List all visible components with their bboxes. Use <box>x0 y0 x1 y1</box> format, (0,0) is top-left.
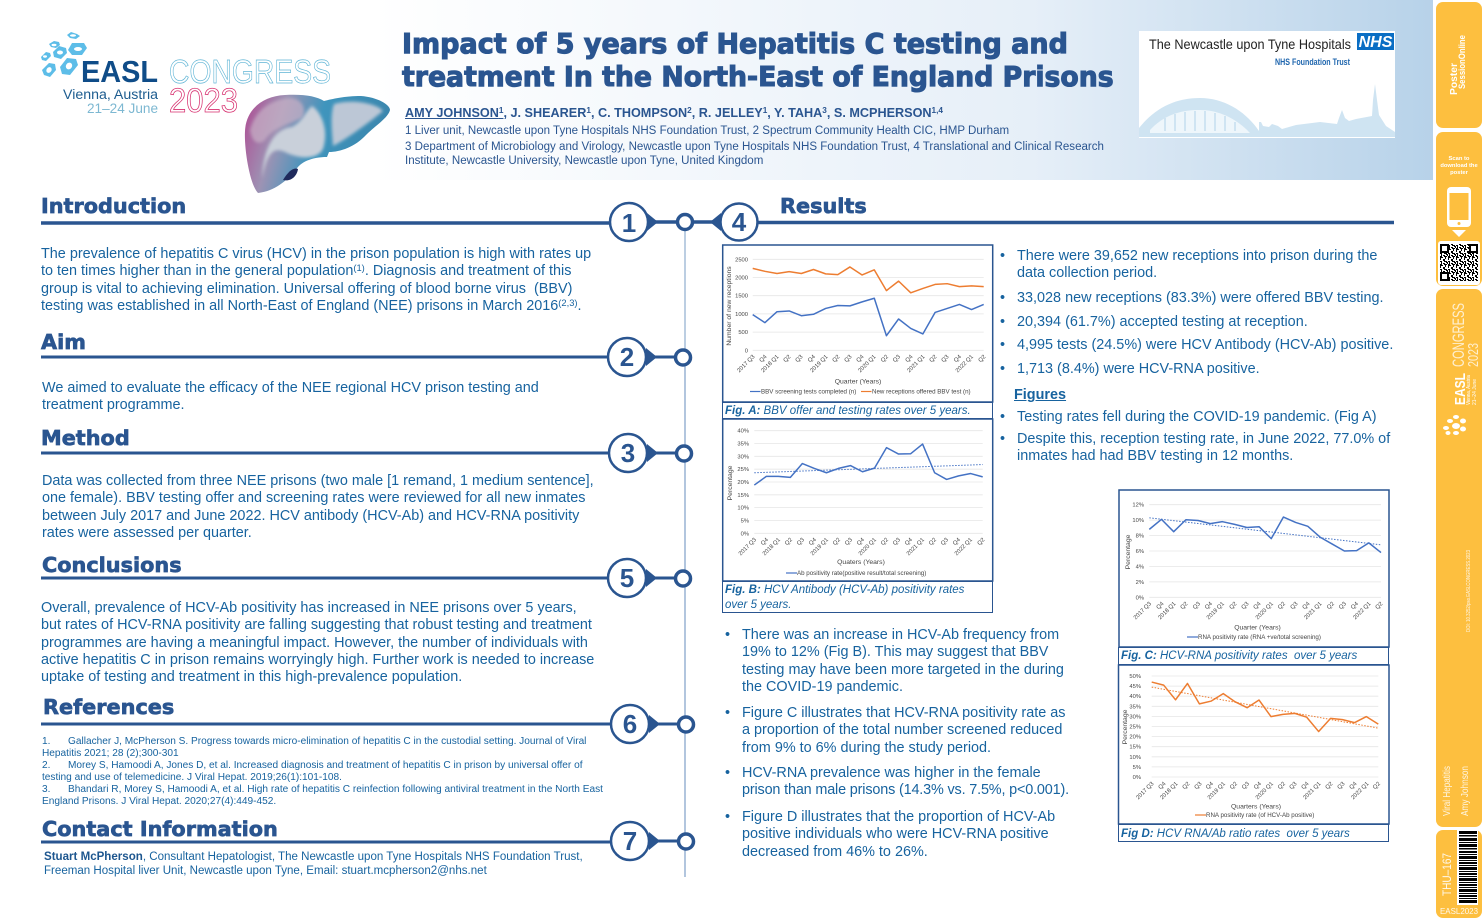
chart: Fig C HCV-RNA positivity: 12% <box>1132 503 1144 509</box>
chart: Fig C HCV-RNA positivity: Q3 <box>1338 601 1348 611</box>
chart: Fig D HCV RNA/Ab ratio: Q3 <box>1289 781 1298 791</box>
results bullets: top right: There were 39,652 new receptions into prison during the data collection period. <box>1017 248 1377 281</box>
results bullets: lower middle: Figure D illustrates that the proportion of HCV-Ab positive individuals who were HCV-RNA positive decreased from 46% to 26%. <box>742 809 1055 860</box>
chart: Fig B HCV antibody positivity: Q2 <box>880 537 890 547</box>
chart: Fig C HCV-RNA positivity: Quarter (Years) <box>1234 624 1281 632</box>
chart: Fig C HCV-RNA positivity: Q4 <box>1302 601 1312 611</box>
chart: Fig D HCV RNA/Ab ratio: 2019 Q1 <box>1207 781 1227 801</box>
chart: Fig D HCV RNA/Ab ratio: 45% <box>1129 684 1141 690</box>
results bullets: lower middle: • <box>725 809 730 825</box>
icon: hexagon cluster <box>41 32 87 77</box>
section rule and node 3 <box>41 434 692 472</box>
sidebar: rotated congress branding: 21–24 June <box>1472 379 1478 405</box>
icon: bridge and skyline <box>1139 84 1395 137</box>
chart: Fig B HCV antibody positivity: Q2 <box>977 537 986 547</box>
heading: Contact Information: Contact Information <box>42 817 278 841</box>
chart: Fig D HCV RNA/Ab ratio: 25% <box>1129 724 1141 730</box>
chart: Fig A BBV offer and testing: Q4 <box>807 354 817 364</box>
chart: Fig C HCV-RNA positivity: Q2 <box>1180 601 1189 611</box>
chart: Fig B HCV antibody positivity: 0% <box>741 531 749 537</box>
section rule and node 7: 7 <box>623 826 637 856</box>
chart: Fig C HCV-RNA positivity: Q2 <box>1229 601 1238 611</box>
results bullets: top right: • <box>1000 409 1005 425</box>
sidebar: rotated congress branding: EASL <box>1452 373 1469 405</box>
heading: Results: Results <box>780 194 867 218</box>
caption: Fig A: Fig. A: BBV offer and testing rates over 5 years. <box>725 405 971 417</box>
chart: Fig A BBV offer and testing: 2020 Q1 <box>857 354 877 374</box>
chart: Fig A BBV offer and testing: Q4 <box>905 354 915 364</box>
chart: Fig C HCV-RNA positivity: 4% <box>1136 564 1144 570</box>
chart: Fig D HCV RNA/Ab ratio: 0% <box>1133 775 1141 781</box>
section rule and node 2 <box>41 338 690 376</box>
chart: Fig D HCV RNA/Ab ratio: 50% <box>1129 674 1141 680</box>
chart: Fig C HCV-RNA positivity: Q4 <box>1156 601 1166 611</box>
results bullets: top right: • <box>1000 248 1005 264</box>
chart: Fig A BBV offer and testing: Q3 <box>844 354 853 364</box>
logo: Newcastle upon Tyne Hospitals NHS <box>1139 31 1395 138</box>
chart: Fig B HCV antibody positivity: Ab positivity rate(positive result/total screening) <box>797 570 926 577</box>
chart: Fig C HCV-RNA positivity: Percentage <box>1125 534 1132 569</box>
section rule and node 1: 1 <box>622 208 636 238</box>
chart: Fig A BBV offer and testing: 2000 <box>735 276 748 282</box>
chart: Fig B HCV antibody positivity: Percentage <box>727 465 734 500</box>
chart: Fig D HCV RNA/Ab ratio: 2018 Q1 <box>1159 781 1179 801</box>
sidebar: scan to download text: download the <box>1440 163 1478 169</box>
results bullets: top right: 20,394 (61.7%) accepted testing at reception. <box>1017 314 1308 330</box>
heading: Conclusions: Conclusions <box>42 553 182 577</box>
chart: Fig D HCV RNA/Ab ratio: Q4 <box>1349 781 1359 791</box>
chart: Fig D HCV RNA/Ab ratio: 2022 Q1 <box>1350 781 1370 801</box>
chart: Fig C HCV-RNA positivity: 2020 Q1 <box>1255 601 1275 621</box>
chart: Fig C HCV-RNA positivity: Q4 <box>1204 601 1214 611</box>
chart: Fig C HCV-RNA positivity: Q3 <box>1290 601 1299 611</box>
chart: Fig C HCV-RNA positivity: 2022 Q1 <box>1352 601 1372 621</box>
chart: Fig B HCV antibody positivity: 20% <box>737 480 749 486</box>
chart: Fig C HCV-RNA positivity: Q2 <box>1277 601 1287 611</box>
EASL Congress logo: 21–24 June <box>87 101 158 116</box>
timeline vertical line <box>684 230 686 877</box>
results bullets: top right: • <box>1000 290 1005 306</box>
text: method: Data was collected from three NEE prisons (two male [1 remand, 1 medium sentence], one female). BBV testing offer and screening rates were reviewed for all new inmates between July 2017 and June 2022. HCV antibody (HCV-Ab) and HCV-RNA positivity rates were assessed per quarter. <box>42 473 594 541</box>
chart: Fig C HCV-RNA positivity: Q3 <box>1192 601 1202 611</box>
chart: Fig B HCV antibody positivity: Quaters (Years) <box>837 559 885 566</box>
caption: Fig D <box>1118 824 1389 842</box>
icon: QR code <box>1438 241 1480 285</box>
heading: Introduction: Introduction <box>41 194 186 218</box>
chart: Fig C HCV-RNA positivity: Q2 <box>1326 601 1336 611</box>
chart: Fig A BBV offer and testing: 1500 <box>735 294 748 300</box>
sidebar: barcode <box>1457 830 1478 905</box>
chart: Fig D HCV RNA/Ab ratio: 2017 Q3 <box>1135 781 1155 801</box>
chart: Fig D HCV RNA/Ab ratio: Q4 <box>1205 781 1215 791</box>
heading: Method: Method <box>41 426 130 450</box>
results bullets: lower middle: • <box>725 627 730 643</box>
chart: Fig C HCV-RNA positivity: 8% <box>1136 534 1144 540</box>
chart: Fig A BBV offer and testing: 2022 Q1 <box>955 354 975 374</box>
chart: Fig A BBV offer and testing: Q2 <box>978 354 987 364</box>
chart: Fig B HCV antibody positivity: 5% <box>741 518 749 524</box>
chart: Fig B HCV antibody positivity: 2018 Q1 <box>762 537 782 557</box>
results bullets: top right: • <box>1000 431 1005 447</box>
chart: Fig C HCV-RNA positivity: 2% <box>1136 580 1144 586</box>
chart: Fig D HCV RNA/Ab ratio: Q2 <box>1372 781 1382 791</box>
chart: Fig A BBV offer and testing: Q3 <box>941 354 950 364</box>
results bullets: top right: 4,995 tests (24.5%) were HCV Antibody (HCV-Ab) positive. <box>1017 337 1393 353</box>
chart: Fig C HCV-RNA positivity: Q3 <box>1241 601 1250 611</box>
text: references: Gallacher J, McPherson S. Progress towards micro-elimination of hepatitis C in the custodial setting. Journal of Viral Hepatitis 2021; 28 (2);300-301 Morey S, Hamoodi A, Jones D, et al. Increased diagnosis and treatment of hepatitis C in prison by universal offer of testing and use of telemedicine. J Viral Hepat. 2019;26(1):101-108. Bhandari R, Morey S, Hamoodi A, et al. High rate of hepatitis C reinfection following antiviral treatment in the North East England Prisons. J Viral Hepat. 2020;27(4):449-452. <box>42 736 603 807</box>
chart: Fig A BBV offer and testing: Q4 <box>953 354 963 364</box>
results bullets: lower middle <box>725 627 1069 860</box>
chart: Fig A BBV offer and testing: Quarter (Years) <box>835 378 881 386</box>
chart: Fig D HCV RNA/Ab ratio: Q4 <box>1253 781 1263 791</box>
chart: Fig A BBV offer and testing: Q2 <box>929 354 938 364</box>
chart: Fig B HCV antibody positivity: 2020 Q1 <box>858 537 878 557</box>
chart: Fig B HCV antibody positivity: 40% <box>737 429 749 435</box>
chart: Fig A BBV offer and testing: 2021 Q1 <box>906 354 926 374</box>
chart: Fig B HCV antibody positivity: 2021 Q1 <box>906 537 926 557</box>
affiliations: 1 Liver unit, Newcastle upon Tyne Hospitals NHS Foundation Trust, 2 Spectrum Community Health CIC, HMP Durham 3 Department of Microbiology and Virology, Newcastle upon Tyne Hospitals NHS Foundation Trust, 4 Translational and Clinical Research Institute, Newcastle University, Newcastle upon Tyne, United Kingdom <box>405 125 1104 167</box>
chart: Fig B HCV antibody positivity: Q3 <box>844 537 854 547</box>
heading: References: References <box>43 695 174 719</box>
results bullets: lower middle: • <box>725 705 730 721</box>
text: references: 2. <box>42 760 50 771</box>
sidebar: scan to download text: Scan to <box>1449 156 1470 162</box>
chart: Fig D HCV RNA/Ab ratio: 10% <box>1129 755 1141 761</box>
section rule and node 7 <box>41 822 694 860</box>
chart: Fig D HCV RNA/Ab ratio <box>1118 665 1389 824</box>
title: Impact of 5 years of Hepatitis C testing and <box>402 26 1068 60</box>
chart: Fig B HCV antibody positivity: Q3 <box>940 537 950 547</box>
chart: Fig B HCV antibody positivity: 2017 Q3 <box>738 537 758 557</box>
chart: Fig A BBV offer and testing: 2018 Q1 <box>760 354 780 374</box>
section rule and node 4 <box>693 204 1394 240</box>
chart: Fig A BBV offer and testing: New receptions offered BBV test (n) <box>872 388 971 396</box>
section rule and node 6 <box>41 705 694 743</box>
chart: Fig B HCV antibody positivity: Q4 <box>952 537 962 547</box>
chart: Fig C HCV-RNA positivity: Q4 <box>1253 601 1263 611</box>
EASL Congress logo: 2023 <box>169 82 238 120</box>
chart: Fig A BBV offer and testing: Q2 <box>880 354 890 364</box>
chart: Fig D HCV RNA/Ab ratio: Q3 <box>1337 781 1346 791</box>
sidebar: topic and author <box>1441 766 1471 816</box>
chart: Fig A BBV offer and testing: Q3 <box>795 354 804 364</box>
chart: Fig B HCV antibody positivity: Q2 <box>784 537 794 547</box>
chart: Fig C HCV-RNA positivity <box>1119 490 1389 647</box>
chart: Fig B HCV antibody positivity: Q4 <box>760 537 770 547</box>
chart: Fig D HCV RNA/Ab ratio: 40% <box>1129 694 1141 700</box>
chart: Fig D HCV RNA/Ab ratio: RNA positivity rate (of HCV-Ab positive) <box>1206 812 1314 819</box>
chart: Fig D HCV RNA/Ab ratio: 35% <box>1129 704 1141 710</box>
text: contact: Stuart McPherson, Consultant Hepatologist, The Newcastle upon Tyne Hospitals NHS Foundation Trust, Freeman Hospital liver Unit, Newcastle upon Tyne, Email: stuart.mcpherson2@nhs.net <box>44 851 583 877</box>
text: conclusions: Overall, prevalence of HCV-Ab positivity has increased in NEE prisons over 5 years, but rates of HCV-RNA positivity are falling suggesting that robust testing and treatment programmes are having a meaningful impact. However, the number of individuals with active hepatitis C in prison remains worryingly high. Further work is needed to increase uptake of testing and treatment in this high-prevalence population. <box>41 600 594 685</box>
chart: Fig D HCV RNA/Ab ratio: Percentage <box>1122 709 1129 744</box>
chart: Fig D HCV RNA/Ab ratio: Q2 <box>1229 781 1239 791</box>
chart: Fig D HCV RNA/Ab ratio: 20% <box>1129 735 1141 741</box>
sidebar: scan to download text <box>1440 156 1478 176</box>
chart: Fig A BBV offer and testing: Q4 <box>759 354 769 364</box>
results bullets: top right: Testing rates fell during the COVID-19 pandemic. (Fig A) <box>1017 409 1377 425</box>
chart: Fig B HCV antibody positivity: 35% <box>737 442 749 448</box>
chart: Fig B HCV antibody positivity: 15% <box>737 493 749 499</box>
text: introduction: The prevalence of hepatitis C virus (HCV) in the prison population is high with rates up to ten times higher than in the general population(1). Diagnosis and treatment of this group is vital to achieving elimination. Universal offering of blood borne virus (BBV) testing was established in all North-East of England (NEE) prisons in March 2016(2,3). <box>41 246 591 314</box>
section rule and node 1 <box>41 203 692 241</box>
results bullets: lower middle: • <box>725 765 730 781</box>
chart: Fig A BBV offer and testing: 0 <box>745 348 748 354</box>
chart: Fig D HCV RNA/Ab ratio: Q3 <box>1241 781 1251 791</box>
chart: Fig B HCV antibody positivity: 2019 Q1 <box>810 537 830 557</box>
results bullets: top right: 33,028 new receptions (83.3%) were offered BBV testing. <box>1017 290 1384 306</box>
chart: Fig B HCV antibody positivity: Q2 <box>832 537 842 547</box>
chart: Fig B HCV antibody positivity: 10% <box>737 506 749 512</box>
chart: Fig D HCV RNA/Ab ratio: 15% <box>1129 745 1141 751</box>
sidebar: topic and author: Amy Johnson <box>1459 766 1471 816</box>
chart: Fig D HCV RNA/Ab ratio: Q2 <box>1182 781 1191 791</box>
icon: liver illustration <box>245 95 390 193</box>
section rule and node 5 <box>41 559 690 597</box>
caption: Fig B: Fig. B: HCV Antibody (HCV-Ab) positivity rates over 5 years. <box>725 584 964 611</box>
chart: Fig A BBV offer and testing: 2019 Q1 <box>809 354 829 374</box>
chart: Fig A BBV offer and testing: 1000 <box>735 312 748 318</box>
section rule and node 6: 6 <box>623 709 637 739</box>
sidebar: poster session online logo: Poster <box>1449 63 1460 95</box>
chart: Fig C HCV-RNA positivity: 2017 Q3 <box>1133 601 1153 621</box>
chart: Fig C HCV-RNA positivity: RNA positivity rate (RNA +ve/total screening) <box>1198 634 1321 641</box>
chart: Fig B HCV antibody positivity: 25% <box>737 467 749 473</box>
section rule and node 5: 5 <box>620 563 634 593</box>
EASL Congress logo: CONGRESS <box>169 53 331 90</box>
results bullets: top right: Despite this, reception testing rate, in June 2022, 77.0% of inmates had had BBV testing in 12 months. <box>1017 431 1390 464</box>
sidebar: rotated congress branding: CONGRESS <box>1449 303 1468 367</box>
chart: Fig C HCV-RNA positivity: Q2 <box>1375 601 1384 611</box>
chart: Fig A BBV offer and testing: 2500 <box>735 257 748 263</box>
chart: Fig C HCV-RNA positivity: 2018 Q1 <box>1157 601 1177 621</box>
chart: Fig B HCV antibody positivity <box>723 419 993 581</box>
logo: Newcastle upon Tyne Hospitals NHS: The Newcastle upon Tyne Hospitals <box>1149 36 1351 52</box>
results bullets: top right: 1,713 (8.4%) were HCV-RNA positive. <box>1017 361 1260 377</box>
caption: Fig D: Fig D: HCV RNA/Ab ratio rates over 5 years <box>1121 828 1350 840</box>
EASL Congress logo: Vienna, Austria <box>63 87 159 102</box>
chart: Fig A BBV offer and testing: Number of new receptions <box>726 266 733 346</box>
sidebar: DOI text: DOI: 10.3252/pso.EASLCONGRESS.2023 <box>1466 550 1472 632</box>
chart: Fig C HCV-RNA positivity: 6% <box>1136 549 1144 555</box>
chart: Fig A BBV offer and testing: BBV screening tests completed (n) <box>761 388 856 396</box>
title <box>402 26 1114 93</box>
caption: Fig A <box>722 402 993 419</box>
chart: Fig D HCV RNA/Ab ratio: 30% <box>1129 714 1141 720</box>
sidebar: EASL2023 tag: EASL2023 <box>1440 906 1478 916</box>
sidebar: rotated congress branding: 2023 <box>1465 343 1482 367</box>
header gradient band <box>0 0 1433 180</box>
chart: Fig A BBV offer and testing <box>723 245 993 402</box>
heading: Aim: Aim <box>41 330 86 354</box>
authors: AMY JOHNSON1, J. SHEARER1, C. THOMPSON2, R. JELLEY1, Y. TAHA3, S. MCPHERSON1,4 <box>405 106 943 120</box>
chart: Fig A BBV offer and testing: Q2 <box>783 354 792 364</box>
sidebar: poster number: THU–167 <box>1440 853 1454 896</box>
chart: Fig D HCV RNA/Ab ratio: Q2 <box>1277 781 1287 791</box>
sidebar: poster session online logo <box>1449 35 1467 95</box>
chart: Fig B HCV antibody positivity: Q4 <box>856 537 866 547</box>
sidebar: rotated congress branding <box>1443 303 1482 435</box>
results bullets: lower middle: HCV-RNA prevalence was higher in the female prison than male prisons (14.3% vs. 7.5%, p<0.001). <box>742 765 1069 798</box>
EASL Congress logo: EASL <box>81 54 158 89</box>
chart: Fig D HCV RNA/Ab ratio: Q3 <box>1194 781 1203 791</box>
text: references: 1. <box>42 736 50 747</box>
chart: Fig A BBV offer and testing: Q2 <box>832 354 841 364</box>
results bullets: top right: • <box>1000 361 1005 377</box>
EASL Congress logo <box>41 32 331 120</box>
chart: Fig B HCV antibody positivity: Q4 <box>808 537 818 547</box>
chart: Fig C HCV-RNA positivity: 0% <box>1136 595 1144 601</box>
sidebar: scan to download text: poster <box>1450 170 1469 176</box>
chart: Fig D HCV RNA/Ab ratio: Q4 <box>1301 781 1311 791</box>
results bullets: top right: Figures <box>1014 387 1066 403</box>
chart: Fig D HCV RNA/Ab ratio: Quarters (Years) <box>1231 804 1281 810</box>
caption: Fig C <box>1118 647 1389 665</box>
chart: Fig D HCV RNA/Ab ratio: 2021 Q1 <box>1302 781 1322 801</box>
chart: Fig D HCV RNA/Ab ratio: Q4 <box>1158 781 1168 791</box>
sidebar: poster session online logo: SessionOnline <box>1457 35 1467 89</box>
results bullets: top right <box>1000 248 1393 464</box>
chart: Fig B HCV antibody positivity: 2022 Q1 <box>954 537 974 557</box>
chart: Fig D HCV RNA/Ab ratio: Q2 <box>1325 781 1334 791</box>
results bullets: top right: • <box>1000 314 1005 330</box>
chart: Fig C HCV-RNA positivity: Q4 <box>1350 601 1360 611</box>
results bullets: lower middle: There was an increase in HCV-Ab frequency from 19% to 12% (Fig B). This may suggest that BBV testing may have been more targeted in the during the COVID-19 pandemic. <box>742 627 1064 695</box>
chart: Fig B HCV antibody positivity: Q2 <box>928 537 938 547</box>
chart: Fig C HCV-RNA positivity: 2019 Q1 <box>1206 601 1226 621</box>
chart: Fig A BBV offer and testing: 2017 Q3 <box>736 354 756 374</box>
chart: Fig B HCV antibody positivity: Q4 <box>904 537 914 547</box>
results bullets: lower middle: Figure C illustrates that HCV-RNA positivity rate as a proportion of the total number screened reduced from 9% to 6% during the study period. <box>742 705 1065 756</box>
chart: Fig D HCV RNA/Ab ratio: 5% <box>1133 765 1141 771</box>
chart: Fig D HCV RNA/Ab ratio: 2020 Q1 <box>1255 781 1275 801</box>
text: aim: We aimed to evaluate the efficacy of the NEE regional HCV prison testing and treatment programme. <box>42 380 539 413</box>
text: references: 3. <box>42 784 50 795</box>
section rule and node 2: 2 <box>620 342 634 372</box>
chart: Fig B HCV antibody positivity: Q3 <box>892 537 902 547</box>
title: treatment In the North-East of England Prisons <box>402 60 1114 93</box>
chart: Fig B HCV antibody positivity: Q3 <box>796 537 806 547</box>
results bullets: top right: • <box>1000 337 1005 353</box>
caption: Fig C: Fig. C: HCV-RNA positivity rates over 5 years <box>1121 650 1357 662</box>
chart: Fig A BBV offer and testing: Q4 <box>856 354 866 364</box>
icon: phone <box>1447 187 1471 237</box>
chart: Fig C HCV-RNA positivity: 2021 Q1 <box>1303 601 1323 621</box>
logo: Newcastle upon Tyne Hospitals NHS: NHS <box>1359 34 1393 51</box>
chart: Fig A BBV offer and testing: Q3 <box>892 354 902 364</box>
sidebar: rotated congress branding: Vienna, Austria <box>1466 374 1472 405</box>
section rule and node 4: 4 <box>732 207 747 237</box>
logo: Newcastle upon Tyne Hospitals NHS: NHS Foundation Trust <box>1275 57 1351 68</box>
sidebar: orange panels <box>1436 2 1482 918</box>
chart: Fig B HCV antibody positivity: 30% <box>737 454 749 460</box>
section rule and node 3: 3 <box>621 438 635 468</box>
sidebar: topic and author: Viral Hepatitis <box>1441 766 1453 816</box>
chart: Fig C HCV-RNA positivity: 10% <box>1132 518 1144 524</box>
chart: Fig A BBV offer and testing: 500 <box>738 330 748 336</box>
